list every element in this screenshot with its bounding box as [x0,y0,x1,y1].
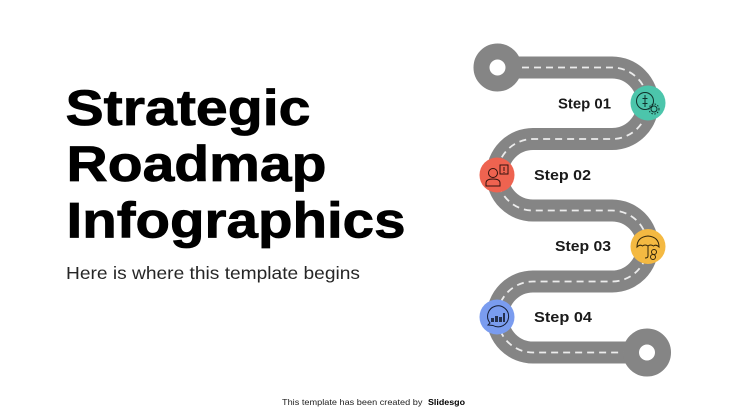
step 03 node [630,229,666,264]
step 04 label: Step 04 [534,310,592,326]
icon: chat bubble with bars [488,306,509,327]
title [66,80,406,248]
road surface [497,68,648,352]
step 01 label: Step 01 [558,96,611,112]
title: Strategic [66,80,310,136]
icon: person with alert [486,165,508,186]
subtitle: Here is where this template begins [66,263,360,283]
road end marker [631,336,663,368]
icon: umbrella with coins [637,236,659,260]
title: Infographics [66,192,406,248]
step 02 label: Step 02 [534,168,591,184]
roadmap road [482,52,663,368]
title: Roadmap [66,136,326,192]
road centre dashes [497,68,648,352]
road start marker [482,52,514,84]
step 04 node [480,300,514,334]
step 01 node [630,86,666,120]
footer credit: This template has been created by [282,397,425,407]
step 02 node [480,158,514,192]
footer credit: Slidesgo [428,397,465,407]
step 03 label: Step 03 [555,239,611,255]
icon: coin and gear [636,92,659,114]
